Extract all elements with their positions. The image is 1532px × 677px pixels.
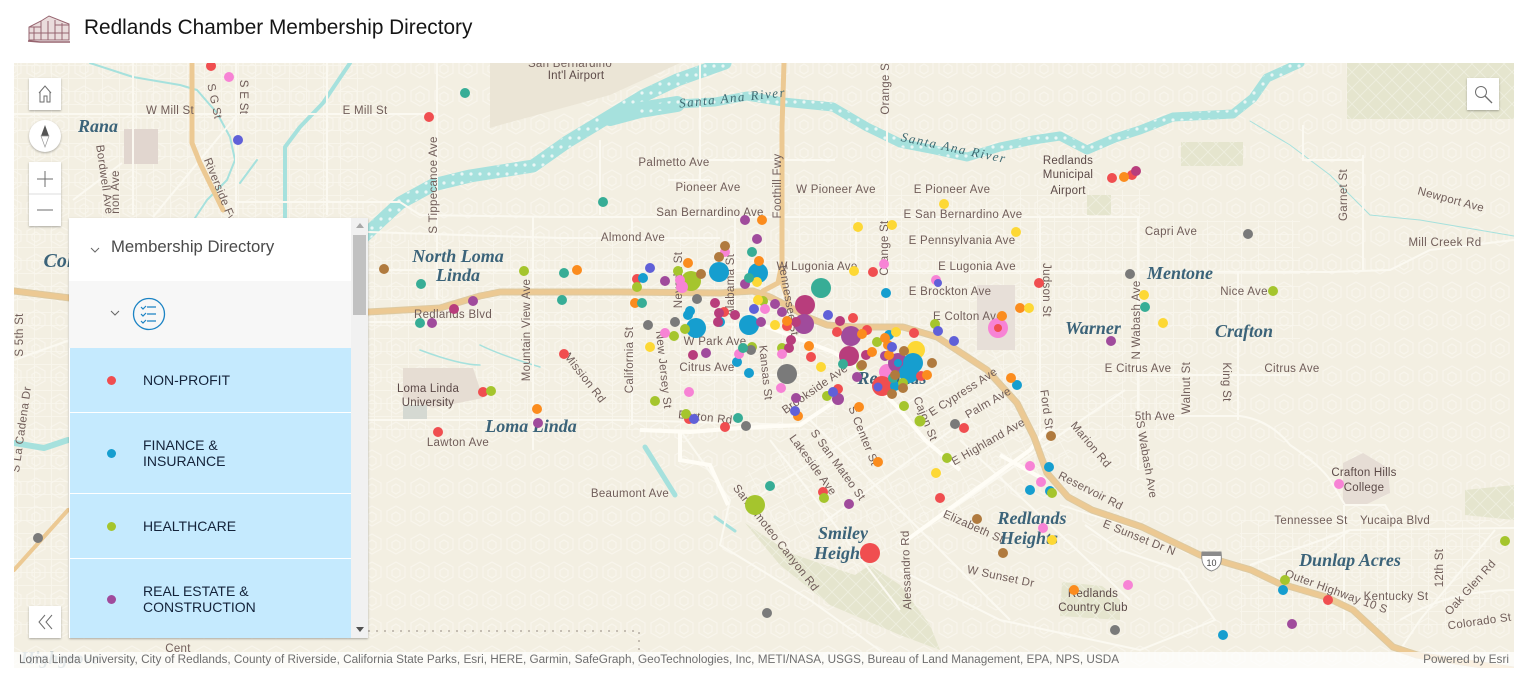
street labels: Capri Ave bbox=[1145, 226, 1197, 238]
street labels: Reservoir Rd bbox=[1056, 470, 1125, 513]
button: home bbox=[29, 78, 61, 110]
place labels dark: Loma Linda bbox=[397, 383, 459, 395]
legend item: real estate and construction: CONSTRUCTION bbox=[143, 599, 256, 615]
icon: chamber building logo bbox=[28, 16, 70, 43]
street labels: Kansas St bbox=[756, 345, 774, 401]
street labels: E Colton Ave bbox=[933, 311, 1003, 323]
street labels: S La Cadena Dr bbox=[10, 386, 34, 473]
street labels: E Pioneer Ave bbox=[914, 184, 990, 196]
street labels: Garnet St bbox=[1338, 169, 1350, 221]
thick arterial roads bbox=[640, 326, 1050, 545]
street labels: Nice Ave bbox=[1220, 286, 1268, 298]
street labels: Tennessee St bbox=[776, 262, 800, 337]
street labels: E Highland Ave bbox=[950, 417, 1027, 468]
street labels: S San Mateo St bbox=[808, 427, 867, 503]
legend item: non-profit bbox=[70, 348, 351, 412]
street labels: Barton Rd bbox=[678, 409, 733, 427]
community labels: Redlands bbox=[856, 368, 927, 388]
street labels: Citrus Ave bbox=[1264, 363, 1320, 375]
panel: membership directory bbox=[69, 218, 368, 638]
river labels: Santa Ana River bbox=[900, 129, 1008, 166]
street labels: Lawton Ave bbox=[427, 437, 489, 449]
street labels: E Lugonia Ave bbox=[938, 261, 1016, 273]
street labels: S Tippecanoe Ave bbox=[428, 136, 440, 234]
community labels: Crafton bbox=[1215, 321, 1273, 341]
icon: interstate 10 shield: 10 bbox=[1206, 558, 1217, 568]
street labels: Redlands Blvd bbox=[414, 309, 492, 321]
legend item: finance and insurance bbox=[70, 413, 351, 493]
legend item: finance and insurance: FINANCE & bbox=[143, 437, 218, 453]
street labels: E Citrus Ave bbox=[1105, 363, 1171, 375]
green parks and campus patches bbox=[124, 63, 1514, 650]
community labels: Loma Linda bbox=[484, 416, 577, 436]
street labels: E Cypress Ave bbox=[927, 366, 1000, 419]
large markers bbox=[681, 262, 1008, 563]
street labels: Kentucky St bbox=[1364, 591, 1429, 603]
community labels: Col bbox=[44, 250, 73, 272]
legend item: real estate and construction bbox=[70, 559, 351, 638]
place labels dark: University bbox=[402, 397, 454, 409]
legend item: real estate and construction: REAL ESTATE & bbox=[143, 583, 249, 599]
street labels: 12th St bbox=[1434, 548, 1446, 587]
community labels: Highgrove bbox=[20, 648, 100, 668]
street labels: Citrus Ave bbox=[679, 362, 735, 374]
attribution text: Loma Linda University, City of Redlands, County of Riverside, California State Parks, Esri, HERE, Garmin, SafeGraph, GeoTechnologies, Inc, METI/NASA, USGS, Bureau of Land Management, EPA, NPS, USDA bbox=[19, 653, 1119, 666]
street labels: N Wabash Ave bbox=[1131, 280, 1143, 360]
street labels: E Pennsylvania Ave bbox=[909, 235, 1015, 247]
legend item: healthcare bbox=[70, 494, 351, 558]
community labels: Dunlap Acres bbox=[1298, 550, 1401, 570]
community labels: Heights bbox=[999, 528, 1058, 548]
street labels: Oak Glen Rd bbox=[1443, 558, 1499, 618]
street labels: Newport Ave bbox=[1416, 185, 1485, 215]
river labels: Santa Ana River bbox=[678, 84, 787, 111]
street labels: Bordwell Ave bbox=[93, 144, 115, 215]
street labels: Palm Ave bbox=[964, 386, 1013, 421]
place labels dark: Municipal bbox=[1043, 169, 1093, 181]
airport area bbox=[490, 63, 680, 128]
street labels: San Bernardino Ave bbox=[656, 207, 764, 219]
place labels dark: Airport bbox=[1050, 185, 1086, 197]
street labels: Mill Creek Rd bbox=[1409, 237, 1481, 249]
street labels: W Mill St bbox=[146, 105, 195, 117]
street labels: Almond Ave bbox=[601, 232, 665, 244]
street labels: Yucaipa Blvd bbox=[1360, 515, 1430, 527]
street labels: Cent bbox=[165, 643, 191, 655]
scrollbar bbox=[351, 218, 368, 638]
street labels: E San Bernardino Ave bbox=[904, 209, 1022, 221]
Santa Ana River bbox=[14, 63, 1514, 531]
street labels: Beaumont Ave bbox=[591, 488, 669, 500]
place labels dark bbox=[397, 70, 1397, 614]
street labels: New Jersey St bbox=[653, 330, 673, 410]
street labels: Orange St bbox=[880, 59, 892, 115]
street labels: San Timoteo Canyon Rd bbox=[730, 483, 821, 594]
street labels: Colorado St bbox=[1447, 612, 1513, 632]
place labels dark: Redlands bbox=[1043, 155, 1093, 167]
community labels: Rana bbox=[77, 116, 118, 136]
powered by: Powered by Esri bbox=[1423, 652, 1509, 666]
street labels: Riverside Fwy bbox=[201, 156, 241, 231]
street labels: Pioneer Ave bbox=[675, 182, 741, 194]
place labels dark: College bbox=[1344, 482, 1384, 494]
street labels: Marion Rd bbox=[1068, 420, 1113, 470]
street labels: Walnut St bbox=[1181, 361, 1193, 414]
county boundary dashed bbox=[368, 631, 639, 668]
street labels: E Brockton Ave bbox=[909, 286, 991, 298]
street labels: Foothill Fwy bbox=[772, 154, 784, 218]
street labels: W Park Ave bbox=[684, 336, 746, 348]
street labels: Cajon St bbox=[911, 395, 939, 443]
street labels: S E St bbox=[237, 80, 249, 115]
button: compass bbox=[29, 120, 61, 152]
legend item: non-profit: NON-PROFIT bbox=[143, 372, 230, 388]
street labels: Ford St bbox=[1037, 389, 1055, 431]
street labels: S Wabash Ave bbox=[1133, 420, 1159, 499]
place labels dark: Country Club bbox=[1058, 602, 1128, 614]
street labels: Judson St bbox=[1040, 263, 1052, 317]
community labels: Linda bbox=[435, 265, 480, 285]
street labels: Palmetto Ave bbox=[638, 157, 710, 169]
attribution bar bbox=[14, 652, 1514, 668]
community labels bbox=[20, 116, 1401, 668]
street labels: S 5th St bbox=[14, 313, 26, 357]
panel heading bbox=[69, 218, 351, 281]
street labels: King St bbox=[1220, 362, 1232, 402]
legend item: healthcare: HEALTHCARE bbox=[143, 518, 236, 534]
street labels: Mission Rd bbox=[561, 351, 608, 405]
street labels: Alessandro Rd bbox=[900, 530, 914, 610]
community labels: Redlands bbox=[996, 508, 1067, 528]
street labels: Tennessee St bbox=[1274, 515, 1348, 527]
street labels: California St bbox=[624, 326, 636, 393]
street labels: Nevada St bbox=[673, 251, 685, 308]
community labels: North Loma bbox=[411, 246, 504, 266]
street labels: Mountain View Ave bbox=[521, 279, 533, 381]
place labels dark: Crafton Hills bbox=[1331, 467, 1397, 479]
community labels: Smiley bbox=[818, 523, 869, 543]
button: search bbox=[1467, 78, 1499, 110]
button: collapse panel bbox=[29, 606, 61, 638]
street labels: S Center St bbox=[845, 405, 880, 468]
street labels: E Sunset Dr N bbox=[1101, 518, 1177, 558]
street labels: Brookside Ave bbox=[780, 362, 850, 417]
legend item: finance and insurance: INSURANCE bbox=[143, 453, 225, 469]
street labels: W Pioneer Ave bbox=[796, 184, 876, 196]
title: Redlands Chamber Membership Directory bbox=[84, 16, 472, 39]
button: zoom controls bbox=[29, 162, 61, 226]
street labels: non Ave bbox=[110, 170, 122, 214]
place labels dark: Redlands bbox=[1068, 588, 1118, 600]
street labels: W Lugonia Ave bbox=[776, 261, 858, 273]
layer list toggle bbox=[69, 281, 351, 348]
community labels: Heights bbox=[813, 543, 872, 563]
street labels: San Bernardino bbox=[528, 58, 612, 70]
community labels: Warner bbox=[1065, 318, 1122, 338]
street labels: S G St bbox=[204, 83, 224, 121]
street labels: W Sunset Dr bbox=[966, 564, 1035, 590]
street labels: E Mill St bbox=[343, 105, 388, 117]
street labels: Elizabeth St bbox=[941, 509, 1006, 546]
street labels: 5th Ave bbox=[1135, 411, 1175, 423]
street labels: Lakeside Ave bbox=[786, 433, 838, 498]
street labels: Orange St bbox=[879, 220, 891, 276]
street labels: Outer Highway 10 S bbox=[1283, 568, 1389, 616]
header title bar bbox=[0, 0, 1532, 63]
icon: interstate 10 shield bbox=[1202, 552, 1221, 571]
street labels: Alabama St bbox=[725, 253, 737, 316]
panel heading: Membership Directory bbox=[111, 237, 274, 256]
river labels bbox=[680, 90, 1006, 162]
community labels: Mentone bbox=[1146, 263, 1213, 283]
place labels dark: Int'l Airport bbox=[548, 70, 605, 82]
